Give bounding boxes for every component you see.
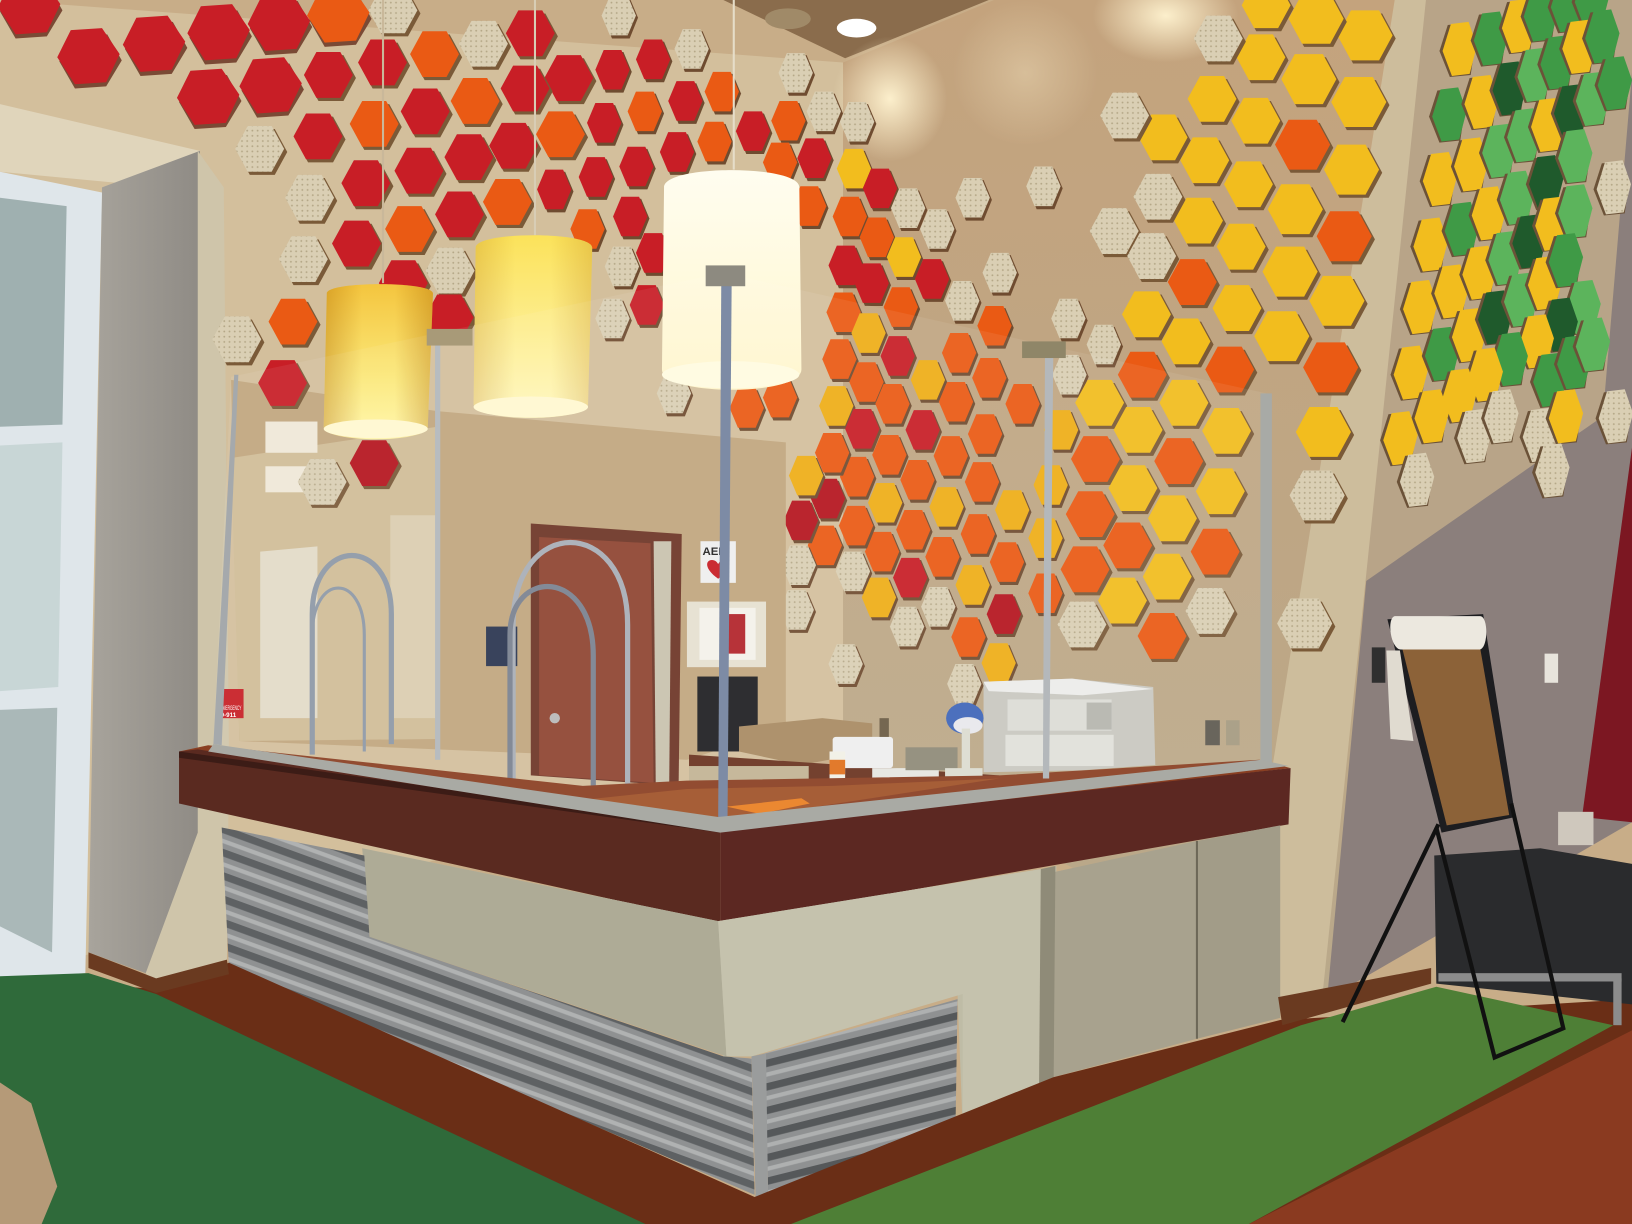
back desk items [689, 677, 999, 804]
printer [984, 679, 1155, 772]
emergency sign [219, 689, 244, 719]
counter fascia [179, 749, 1291, 923]
AED sign [700, 541, 736, 583]
glass arches [312, 543, 628, 796]
floor [0, 952, 1632, 1224]
cabinet doors [1039, 825, 1280, 1124]
room behind glass [231, 360, 786, 760]
glass screen and posts [208, 265, 1289, 833]
pendant lamps [324, 0, 801, 439]
AED cabinet [687, 602, 766, 667]
emergency sign: EMERGENCY [221, 705, 242, 712]
concrete base [362, 848, 1056, 1129]
black sofa [1434, 812, 1632, 1025]
hexagon wall: yellow cluster [1057, 0, 1396, 662]
flip-chart easel [1343, 614, 1563, 1057]
door [486, 524, 682, 786]
hexagon wall: green cluster [1380, 0, 1632, 508]
emergency sign: 9-911 [221, 712, 237, 719]
desk lamp [945, 703, 984, 776]
wall outlets [879, 718, 1240, 745]
AED sign: AED [703, 546, 727, 558]
corrugated metal panels [222, 827, 958, 1199]
hexagon wall: orange cluster [780, 149, 1123, 707]
ceiling with spotlight [723, 0, 1239, 161]
counter top surface [179, 745, 1291, 833]
hexagon wall: red cluster [0, 0, 876, 431]
left doorway and window frame [0, 104, 229, 991]
